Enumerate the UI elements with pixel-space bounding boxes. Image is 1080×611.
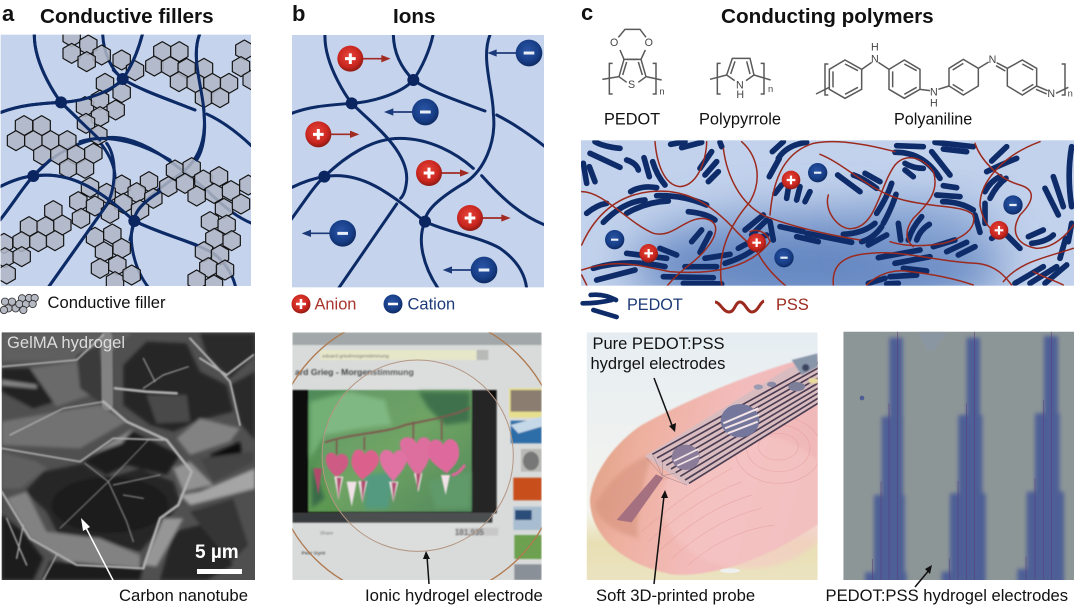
arrow: probe	[654, 490, 668, 584]
chemical structure: polyaniline: H	[871, 42, 879, 54]
panel: ions network	[290, 33, 545, 289]
scale bar: 5 um	[195, 542, 242, 574]
label: polypyrrole: Polypyrrole	[699, 110, 781, 128]
panel label a: a	[2, 1, 15, 26]
chemical structure: PEDOT: n	[659, 87, 665, 97]
legend: PSS	[715, 296, 809, 314]
chemical structure: polyaniline: N	[930, 87, 938, 99]
chemical structure: polyaniline: N	[1047, 88, 1055, 100]
legend: cation	[384, 294, 455, 314]
filler hexagons	[0, 27, 260, 295]
legend: conductive filler: Conductive filler	[48, 293, 166, 312]
third electrode column	[1017, 332, 1064, 584]
flower background leaves	[310, 392, 470, 509]
water droplets	[672, 382, 805, 470]
chemical structure: polypyrrole	[710, 58, 773, 101]
connector	[792, 353, 818, 383]
label: PEDOT:PSS hydrogel electrodes: PEDOT:PSS hydrogel electrodes	[826, 586, 1068, 605]
polymer chains over fillers	[0, 33, 205, 287]
anion arrows	[330, 59, 505, 218]
label: pure PEDOT:PSS hydrogel electrodes: Pure PEDOT:PSS	[592, 335, 725, 353]
heading: conducting polymers: Conducting polymers	[721, 5, 934, 28]
arrow: hydrogel electrodes	[915, 565, 932, 587]
photo: fingertip with probe	[587, 332, 835, 580]
anion spheres	[305, 46, 483, 231]
chemical structure: polyaniline: n	[1068, 89, 1073, 99]
panel: PEDOT:PSS microstructure	[581, 140, 1074, 286]
screen text: Share	[320, 530, 334, 536]
legend: PEDOT	[583, 295, 683, 317]
legend icon: filler cluster	[0, 294, 38, 314]
PEDOT chains	[583, 142, 1072, 284]
chemical structure: PEDOT: O	[645, 37, 653, 49]
chemical structure: polypyrrole: n	[768, 84, 773, 94]
electrode lines	[617, 358, 822, 522]
screen text: Peer Gynt	[302, 550, 326, 556]
second electrode column	[942, 332, 986, 584]
PSS chains	[582, 142, 1073, 287]
screen text: eduard griedmorgenstimmung	[322, 353, 389, 359]
panel label c: c	[581, 0, 593, 25]
label: PEDOT: PEDOT	[604, 110, 660, 128]
photo: patterned PEDOT:PSS electrodes	[843, 332, 1074, 584]
screen text	[295, 353, 484, 556]
screen text: 181,935	[455, 528, 484, 537]
panel label b: b	[292, 1, 305, 26]
chemical structure: polyaniline: N	[871, 53, 879, 65]
heading: ions: Ions	[393, 5, 436, 28]
chemical structure: PEDOT: S	[628, 79, 635, 91]
cation spheres	[329, 40, 542, 283]
label: pure PEDOT:PSS hydrogel electrodes	[590, 335, 725, 373]
legend: conductive filler	[0, 293, 166, 314]
chemical structure: PEDOT	[602, 29, 665, 97]
flower stems and hearts	[313, 408, 470, 507]
chemical structure: polyaniline	[816, 42, 1073, 109]
legend: cation: Cation	[408, 296, 455, 314]
heading: conductive fillers: Conductive fillers	[40, 5, 214, 28]
chemical structure: polypyrrole: N	[736, 79, 744, 91]
crosslink nodes	[27, 73, 140, 227]
label: pure PEDOT:PSS hydrogel electrodes: hydrgel electrodes	[590, 355, 725, 373]
arrow: carbon nanotube	[81, 518, 115, 584]
label: polyaniline: Polyaniline	[894, 110, 972, 128]
label: GelMA hydrogel: GelMA hydrogel	[7, 333, 125, 352]
photo: transparent ionic electrode over screen	[292, 332, 542, 580]
legend: PSS: PSS	[776, 296, 809, 314]
label: ionic hydrogel electrode: Ionic hydrogel electrode	[365, 586, 543, 605]
arrow: ionic electrode	[423, 551, 430, 584]
panel: conductive filler network	[0, 27, 260, 295]
cation arrows	[306, 53, 517, 270]
fingerprint ridges	[608, 417, 822, 565]
first electrode column	[865, 332, 907, 584]
screen text: ard Grieg - Morgenstimmung	[295, 367, 414, 377]
legend: anion: Anion	[314, 296, 356, 314]
photo: SEM of GelMA hydrogel	[2, 332, 255, 580]
ions in polymer	[605, 163, 1023, 267]
chemical structure: polypyrrole: H	[736, 89, 744, 101]
legend: PEDOT: PEDOT	[627, 296, 683, 314]
electrode rings	[292, 332, 542, 580]
label: carbon nanotube: Carbon nanotube	[119, 586, 248, 605]
legend: anion	[292, 294, 356, 314]
scale bar: 5 um: 5 µm	[195, 542, 239, 563]
arrow: electrodes	[654, 378, 676, 432]
chemical structure: polyaniline: N	[989, 54, 996, 66]
chemical structure: PEDOT: O	[610, 37, 618, 49]
chemical structure: polyaniline: H	[930, 97, 938, 109]
label: soft 3D-printed probe: Soft 3D-printed probe	[596, 586, 755, 605]
